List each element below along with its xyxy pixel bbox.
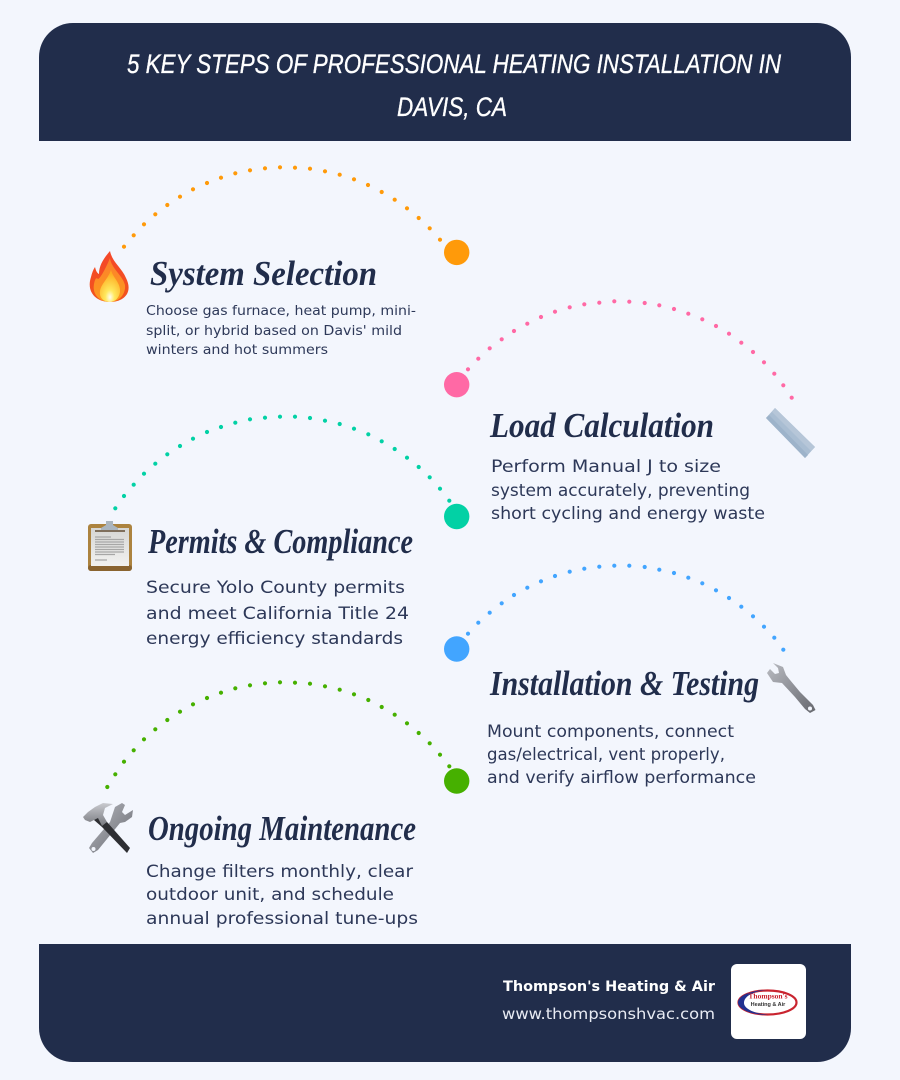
step 5: ongoing maintenance (83, 682, 469, 928)
step 3: permits and compliance (88, 417, 469, 648)
description: installation and testing (487, 722, 756, 787)
dotted arc: teal (115, 417, 449, 508)
marker: teal dot (444, 504, 469, 529)
description: load calculation: Perform Manual J to size (491, 457, 721, 476)
heading: permits and compliance: Permits & Compliance (147, 522, 413, 561)
heading: load calculation: Load Calculation (489, 406, 714, 445)
icon: clipboard (88, 521, 132, 571)
header banner (39, 23, 851, 141)
description: installation and testing: gas/electrical, vent properly, (487, 745, 725, 764)
description: ongoing maintenance: outdoor unit, and schedule (146, 885, 394, 904)
logo (731, 964, 806, 1039)
marker: pink dot (444, 372, 469, 397)
heading: ongoing maintenance: Ongoing Maintenance (148, 809, 416, 848)
dotted arc: orange (124, 167, 440, 247)
title: 5 KEY STEPS OF PROFESSIONAL HEATING INSTALLATION IN (127, 49, 781, 79)
description: installation and testing: and verify airflow performance (487, 768, 756, 787)
description: load calculation (491, 457, 765, 523)
description: load calculation: system accurately, preventing (491, 481, 750, 500)
description: installation and testing: Mount components, connect (487, 722, 735, 741)
marker: blue dot (444, 636, 469, 662)
dotted arc: green (107, 682, 449, 787)
description: system selection: split, or hybrid based on Davis' mild (146, 323, 402, 339)
step 2: load calculation (444, 301, 815, 523)
company name: Thompson's Heating & Air (503, 979, 716, 995)
description: ongoing maintenance: annual professional tune-ups (146, 909, 418, 928)
title: DAVIS, CA (397, 92, 507, 122)
description: permits and compliance: Secure Yolo County permits (146, 578, 405, 597)
description: system selection: winters and hot summers (146, 342, 328, 358)
description: permits and compliance: energy efficiency standards (146, 629, 403, 648)
footer banner (39, 944, 851, 1062)
dotted arc: pink (468, 301, 792, 398)
logo: Heating & Air (751, 1002, 786, 1008)
marker: green dot (444, 768, 469, 794)
icon: hammer and wrench (83, 803, 133, 853)
marker: orange dot (444, 240, 469, 265)
dotted arc: blue (468, 566, 783, 650)
description: ongoing maintenance: Change filters monthly, clear (146, 862, 413, 881)
description: ongoing maintenance (146, 862, 418, 928)
description: system selection (146, 303, 416, 358)
description: permits and compliance (146, 578, 409, 648)
step 4: installation and testing (444, 566, 816, 787)
description: permits and compliance: and meet California Title 24 (146, 604, 409, 623)
step 1: system selection (90, 167, 469, 358)
heading: system selection: System Selection (150, 254, 377, 293)
logo: Thompson's (748, 992, 788, 1000)
icon: fire (90, 251, 129, 302)
icon: ruler (766, 408, 815, 458)
description: system selection: Choose gas furnace, heat pump, mini- (146, 303, 416, 319)
title (127, 49, 781, 122)
description: load calculation: short cycling and energy waste (491, 504, 765, 523)
heading: installation and testing: Installation & Testing (489, 664, 759, 703)
website: www.thompsonshvac.com (502, 1005, 715, 1023)
icon: wrench (767, 663, 816, 713)
